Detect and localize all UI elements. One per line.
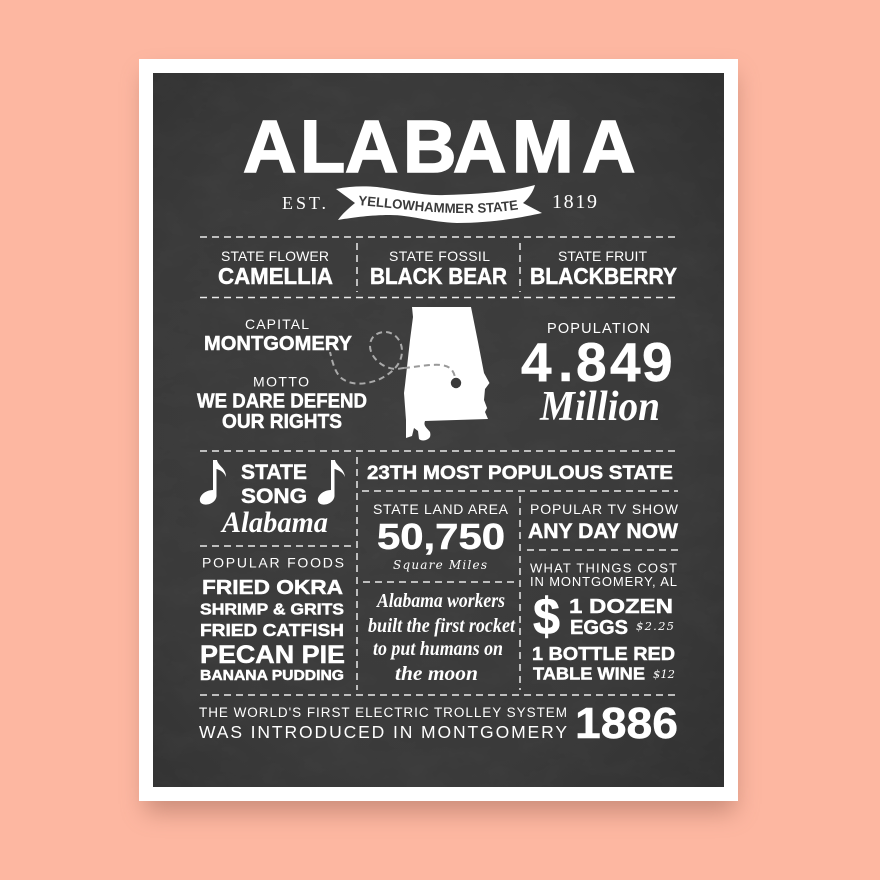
- banner text: YELLOWHAMMER STATE: [359, 196, 518, 213]
- rocket fact: the moon: [395, 663, 478, 685]
- state flower: [218, 248, 333, 289]
- motto: MOTTO: [253, 374, 309, 390]
- rocket fact: to put humans on: [373, 638, 503, 660]
- chalkboard panel: [153, 73, 724, 787]
- song name: Alabama: [220, 506, 328, 539]
- land area: STATE LAND AREA: [373, 501, 509, 517]
- popular foods: PECAN PIE: [200, 641, 345, 669]
- cost of things: $2.25: [636, 619, 674, 633]
- song label second line: SONG: [241, 485, 307, 508]
- cost of things: IN MONTGOMERY, AL: [530, 574, 677, 589]
- cost of things: 1 BOTTLE RED: [532, 643, 675, 664]
- cost of things: TABLE WINE: [533, 664, 645, 684]
- capital: MONTGOMERY: [204, 332, 352, 355]
- population: POPULATION: [547, 321, 650, 337]
- icon: right music note: [318, 460, 345, 505]
- trolley fact: WAS INTRODUCED IN MONTGOMERY: [199, 722, 567, 742]
- tv show: ANY DAY NOW: [528, 520, 678, 543]
- trolley fact: 1886: [575, 699, 678, 748]
- motto: OUR RIGHTS: [222, 411, 342, 433]
- song label: STATE: [241, 461, 307, 484]
- capital: [204, 316, 352, 355]
- icon: dollar sign: $: [533, 588, 560, 646]
- popular foods: BANANA PUDDING: [200, 668, 344, 684]
- state fruit: [530, 248, 677, 289]
- state flower: STATE FLOWER: [221, 248, 329, 264]
- trolley fact: THE WORLD'S FIRST ELECTRIC TROLLEY SYSTEM: [199, 705, 567, 720]
- populous rank: 23TH MOST POPULOUS STATE: [367, 462, 673, 484]
- cost of things: [530, 560, 677, 684]
- title: ALABAMA: [243, 105, 635, 188]
- popular foods: POPULAR FOODS: [202, 554, 344, 570]
- capital: CAPITAL: [245, 316, 309, 332]
- land area: 50,750: [377, 516, 505, 557]
- rocket fact: built the first rocket: [368, 615, 516, 637]
- poster shadow: [145, 74, 735, 812]
- cost of things: $12: [653, 667, 675, 681]
- est label: EST.: [282, 193, 326, 213]
- state fossil: [370, 248, 507, 289]
- cost of things: WHAT THINGS COST: [530, 560, 677, 576]
- popular foods: SHRIMP & GRITS: [200, 602, 344, 618]
- state fossil: STATE FOSSIL: [389, 248, 490, 264]
- trolley fact: [199, 699, 678, 748]
- year label: 1819: [552, 191, 597, 213]
- popular foods: [200, 554, 345, 684]
- popular foods: FRIED CATFISH: [200, 620, 344, 640]
- state fossil: BLACK BEAR: [370, 263, 507, 289]
- land area: Square Miles: [393, 558, 487, 572]
- rocket fact: [368, 590, 516, 685]
- poster white frame: [139, 59, 738, 801]
- state fruit: STATE FRUIT: [558, 248, 647, 264]
- motto: [197, 374, 367, 433]
- established line: [282, 185, 597, 223]
- icon: left music note: [200, 460, 226, 505]
- population: [521, 321, 673, 430]
- state flower: CAMELLIA: [218, 263, 333, 289]
- state fruit: BLACKBERRY: [530, 263, 677, 289]
- tv show: POPULAR TV SHOW: [530, 501, 679, 517]
- land area: [373, 501, 509, 572]
- motto: WE DARE DEFEND: [197, 390, 367, 412]
- cost of things: 1 DOZEN: [569, 595, 673, 618]
- banner: [336, 185, 542, 223]
- population: 4.849: [521, 331, 673, 393]
- state song: [200, 460, 345, 539]
- popular foods: FRIED OKRA: [202, 576, 343, 599]
- map of Alabama with route: [330, 307, 490, 440]
- cost of things: EGGS: [570, 616, 628, 639]
- capital marker: [451, 378, 461, 388]
- population: Million: [539, 384, 660, 430]
- tv show: [528, 501, 679, 543]
- rocket fact: Alabama workers: [375, 590, 505, 612]
